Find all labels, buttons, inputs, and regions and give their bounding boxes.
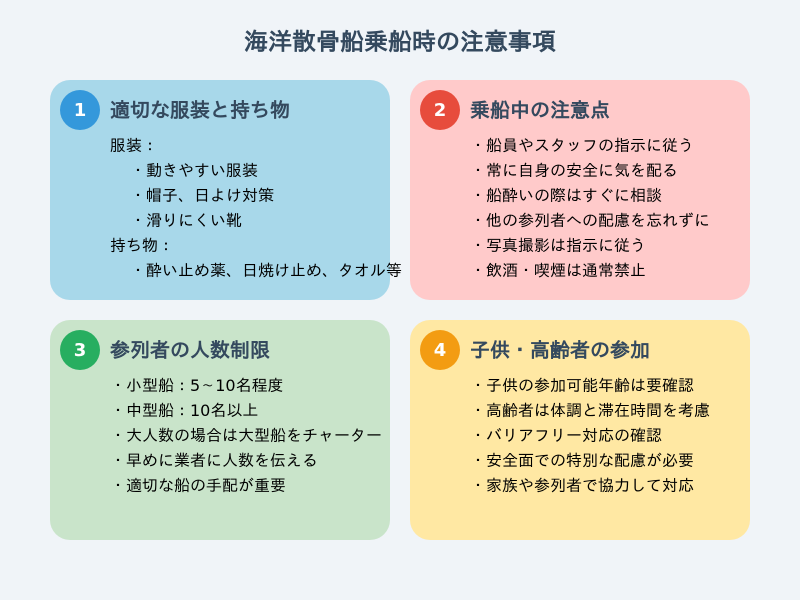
list 3 bbox=[110, 376, 382, 495]
icon: number 3 bbox=[60, 330, 100, 370]
list 3: ・中型船：10名以上 bbox=[110, 401, 258, 420]
list 4: ・家族や参列者で協力して対応 bbox=[470, 476, 694, 495]
list 2: ・船酔いの際はすぐに相談 bbox=[470, 186, 662, 205]
icon: number 1 bbox=[60, 90, 100, 130]
list 2: ・常に自身の安全に気を配る bbox=[470, 161, 678, 180]
list 1: ・動きやすい服装 bbox=[130, 161, 258, 180]
list 4: ・安全面での特別な配慮が必要 bbox=[470, 451, 694, 470]
icon: number 3: 3 bbox=[74, 340, 86, 361]
list 3: ・大人数の場合は大型船をチャーター bbox=[110, 426, 382, 445]
heading 4: 子供・高齢者の参加 bbox=[470, 338, 650, 362]
list 4: ・バリアフリー対応の確認 bbox=[470, 426, 662, 445]
list 3: ・早めに業者に人数を伝える bbox=[110, 451, 318, 470]
list 1: ・滑りにくい靴 bbox=[130, 211, 242, 230]
list 2: ・他の参列者への配慮を忘れずに bbox=[470, 211, 710, 230]
list 4: ・子供の参加可能年齢は要確認 bbox=[470, 376, 694, 395]
list 1: 持ち物： bbox=[110, 236, 174, 255]
icon: number 2 bbox=[420, 90, 460, 130]
heading 1: 適切な服装と持ち物 bbox=[110, 98, 290, 122]
icon: number 4: 4 bbox=[434, 340, 446, 361]
title: 海洋散骨船乗船時の注意事項 bbox=[244, 28, 556, 56]
list 3: ・適切な船の手配が重要 bbox=[110, 476, 286, 495]
list 1: 服装： bbox=[110, 136, 158, 155]
icon: number 4 bbox=[420, 330, 460, 370]
list 4 bbox=[470, 376, 710, 495]
list 1: ・酔い止め薬、日焼け止め、タオル等 bbox=[130, 261, 402, 280]
list 2: ・写真撮影は指示に従う bbox=[470, 236, 646, 255]
list 2: ・飲酒・喫煙は通常禁止 bbox=[470, 261, 646, 280]
icon: number 2: 2 bbox=[434, 100, 446, 121]
panel 2: on board bbox=[410, 80, 750, 300]
panel 1: clothing and belongings bbox=[50, 80, 402, 300]
heading 3: 参列者の人数制限 bbox=[110, 338, 270, 362]
panel 3: number of attendees bbox=[50, 320, 390, 540]
panel 4: children and elderly bbox=[410, 320, 750, 540]
icon: number 1: 1 bbox=[74, 100, 86, 121]
list 1: ・帽子、日よけ対策 bbox=[130, 186, 274, 205]
list 2 bbox=[470, 136, 710, 280]
list 1 bbox=[110, 136, 402, 280]
heading 2: 乗船中の注意点 bbox=[470, 98, 610, 122]
list 3: ・小型船：5～10名程度 bbox=[110, 376, 284, 395]
list 2: ・船員やスタッフの指示に従う bbox=[470, 136, 694, 155]
list 4: ・高齢者は体調と滞在時間を考慮 bbox=[470, 401, 710, 420]
